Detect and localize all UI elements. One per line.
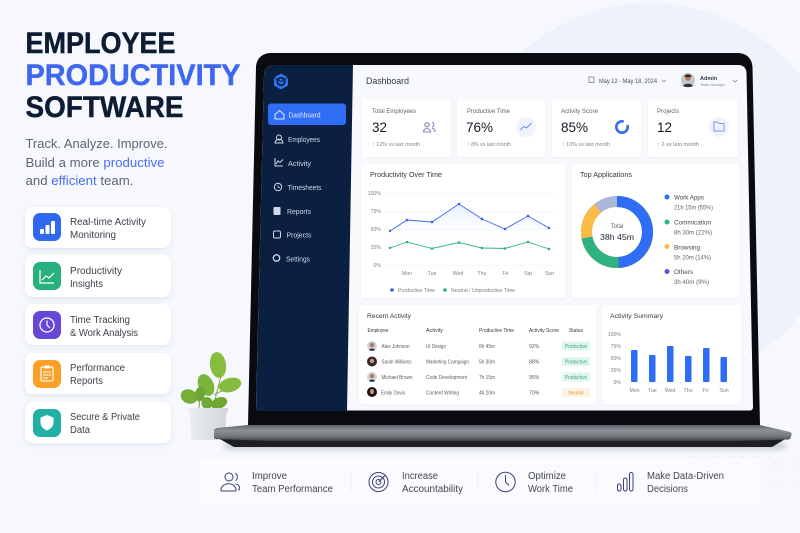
feature: time tracking <box>25 304 171 345</box>
date picker: May 12 - May 18, 2024 <box>599 79 658 85</box>
feature: secure data <box>25 402 171 443</box>
table header: Activity Score <box>529 328 559 334</box>
donut legend: Work Apps <box>674 196 704 202</box>
donut total: Total <box>611 224 623 230</box>
nav: settings: Settings <box>286 256 310 264</box>
admin profile <box>681 73 737 87</box>
title: SOFTWARE <box>26 91 184 124</box>
row: Michael Brown: Productive <box>565 375 587 381</box>
row: Alex Johnson: Alex Johnson <box>382 344 410 350</box>
table header <box>368 328 583 334</box>
benefit: work time <box>496 471 573 495</box>
panel: recent activity: Recent Activity <box>367 313 412 320</box>
line chart: Sat <box>524 271 532 277</box>
table header: Activity <box>426 328 443 334</box>
feature: time tracking: & Work Analysis <box>70 328 138 339</box>
dot grid: bottom <box>690 452 800 494</box>
chart legend <box>390 288 515 294</box>
line chart: Wed <box>453 271 463 277</box>
panel: productivity over time <box>361 164 565 298</box>
laptop base <box>214 425 792 441</box>
nav: reports: Reports <box>287 209 311 216</box>
feature: productivity insights: Productivity <box>70 266 122 277</box>
table header: Employee <box>368 328 389 334</box>
donut legend <box>664 194 713 286</box>
feature: secure data: Data <box>70 425 90 436</box>
bar chart <box>608 332 733 394</box>
subtitle: and efficient team. <box>26 173 134 188</box>
table rows <box>367 341 590 397</box>
donut total <box>600 224 634 242</box>
feature list <box>25 207 171 443</box>
line chart: Mon <box>402 271 412 277</box>
feature: time tracking: Time Tracking <box>70 315 130 326</box>
bar chart: Thu <box>684 388 693 394</box>
chart legend: Productive Time <box>398 288 435 294</box>
bar chart: 25% <box>611 368 621 374</box>
admin profile: Admin <box>700 76 718 82</box>
bar chart: 50% <box>611 356 621 362</box>
bar chart: 75% <box>611 344 621 350</box>
donut legend: Commication <box>674 220 711 226</box>
feature: real-time monitoring <box>25 207 171 248</box>
stat card: total employees: 32 <box>372 120 387 135</box>
sidebar <box>256 65 353 411</box>
nav: activity: Activity <box>288 161 312 168</box>
benefit: data driven: Decisions <box>647 484 688 495</box>
nav: dashboard active: Dashboard <box>288 112 321 120</box>
bar chart: Wed <box>665 388 675 394</box>
panel: activity summary: Activity Summary <box>610 313 664 320</box>
row: Alex Johnson: UI Design <box>426 344 446 350</box>
subtitle: Build a more productive <box>26 155 164 170</box>
bar chart: Mon <box>629 388 640 394</box>
subtitle: Track. Analyze. Improve. <box>26 136 168 151</box>
stat card: activity score <box>552 99 641 157</box>
nav: timesheets: Timesheets <box>288 185 322 192</box>
row: Alex Johnson <box>367 341 590 351</box>
donut total: 38h 45m <box>600 232 634 242</box>
row: Emily Davis: Content Writing <box>426 390 459 396</box>
stat card: projects <box>648 99 738 157</box>
benefit: team performance: Team Performance <box>252 484 333 495</box>
stat card: projects: 12 <box>657 120 672 135</box>
row: Michael Brown: Michael Brown <box>382 375 413 381</box>
date picker <box>589 77 666 85</box>
stat card: total employees <box>362 99 451 157</box>
stat card: projects: Projects <box>657 108 679 115</box>
stat card: activity score: ↑ 10% vs last month <box>562 142 610 148</box>
line chart: 50% <box>371 227 381 233</box>
panel: top applications <box>572 164 739 298</box>
row: Michael Brown <box>367 372 590 382</box>
laptop <box>214 53 792 449</box>
table header: Status <box>569 328 583 334</box>
benefit: work time: Optimize <box>528 471 566 482</box>
background circle <box>458 3 800 387</box>
laptop screen <box>256 65 753 410</box>
row: Emily Davis: 70% <box>529 390 540 396</box>
laptop lid <box>248 53 760 425</box>
donut legend: 3h 40m (9%) <box>674 280 709 286</box>
row: Emily Davis: 4h 20m <box>479 390 495 396</box>
row: Sarah Williams: Marketing Campaign <box>426 360 469 366</box>
row: Emily Davis: Emily Davis <box>381 390 405 396</box>
base underside <box>218 438 787 447</box>
benefit: data driven <box>618 471 724 495</box>
feature: real-time monitoring: Real-time Activity <box>70 217 146 228</box>
bottom benefits strip <box>200 458 760 504</box>
dashboard header: Dashboard <box>366 76 409 86</box>
row: Sarah Williams: Sarah Williams <box>382 360 412 366</box>
line chart: 75% <box>371 209 381 215</box>
laptop base shadow <box>225 443 785 449</box>
donut chart <box>586 202 648 262</box>
stat card: productive time: ↑ 8% vs last month <box>467 142 511 148</box>
donut legend: 21h 15m (55%) <box>674 206 713 212</box>
row: Alex Johnson: 6h 45m <box>479 344 495 350</box>
feature: productivity insights <box>25 255 171 297</box>
bar chart: Fri <box>702 388 709 394</box>
benefit: accountability <box>369 471 463 495</box>
row: Michael Brown: Code Development <box>426 375 468 381</box>
row: Sarah Williams: 88% <box>529 360 540 366</box>
row: Michael Brown: 7h 15m <box>479 375 495 381</box>
panel: activity summary <box>602 305 741 404</box>
admin profile: Team Manager <box>700 83 726 87</box>
nav: dashboard active <box>268 104 346 125</box>
benefit: data driven: Make Data-Driven <box>647 471 724 482</box>
nav items <box>273 135 322 264</box>
panel: productivity over time: Productivity Over Time <box>370 172 442 179</box>
panel: top applications: Top Applications <box>580 172 633 179</box>
benefit: work time: Work Time <box>528 484 573 495</box>
table header: Productive Time <box>479 328 514 334</box>
feature: performance reports: Performance <box>70 363 125 374</box>
line chart: 100% <box>368 191 381 197</box>
flower pot <box>188 408 228 440</box>
benefit: team performance <box>221 471 333 495</box>
benefit: accountability: Increase <box>402 471 438 482</box>
title: EMPLOYEE <box>26 27 176 60</box>
row: Sarah Williams: Productive <box>565 360 587 366</box>
stat card: projects: ↑ 2 vs last month <box>657 142 699 148</box>
logo <box>274 74 288 90</box>
panel: recent activity <box>359 305 596 404</box>
line chart: 0% <box>374 263 381 269</box>
plant <box>178 351 243 440</box>
stat card: activity score: 85% <box>561 120 588 135</box>
stat card: productive time: 76% <box>466 120 493 135</box>
row: Michael Brown: 95% <box>529 375 540 381</box>
stat card: productive time <box>457 99 545 157</box>
title: PRODUCTIVITY <box>26 59 240 92</box>
benefit: accountability: Accountability <box>402 484 463 495</box>
line chart <box>368 191 555 277</box>
row: Alex Johnson: Productive <box>565 344 587 350</box>
row: Emily Davis <box>367 387 590 397</box>
feature: performance reports <box>25 353 171 394</box>
donut legend: Browsing <box>674 246 700 252</box>
nav: employees: Employees <box>288 137 320 144</box>
dot grid: right <box>763 122 793 192</box>
feature: performance reports: Reports <box>70 376 103 387</box>
row: Sarah Williams <box>367 356 590 366</box>
feature: real-time monitoring: Monitoring <box>70 230 116 241</box>
line chart: 25% <box>371 245 381 251</box>
chart legend: Neutral / Unproductive Time <box>451 288 515 294</box>
stat card: productive time: Productive Time <box>467 108 511 115</box>
bar chart: Tue <box>648 388 657 394</box>
line chart: Tue <box>428 271 436 277</box>
bar chart: 100% <box>608 332 621 338</box>
stat card: total employees: Total Employees <box>372 108 416 115</box>
donut legend: Others <box>674 270 693 276</box>
feature: secure data: Secure & Private <box>70 412 140 423</box>
stat card: total employees: ↑ 12% vs last month <box>372 142 420 148</box>
line chart: Thu <box>478 271 487 277</box>
dashboard header <box>366 73 737 87</box>
stat card: activity score: Activity Score <box>561 108 599 115</box>
row: Alex Johnson: 92% <box>529 344 540 350</box>
row: Sarah Williams: 5h 30m <box>479 360 495 366</box>
donut legend: 5h 20m (14%) <box>674 256 711 262</box>
row: Emily Davis: Neutral <box>568 390 584 396</box>
line chart: Fri <box>502 271 509 277</box>
benefit: team performance: Improve <box>252 471 287 482</box>
subtitle <box>26 136 168 188</box>
feature: productivity insights: Insights <box>70 279 103 290</box>
donut legend: 8h 30m (22%) <box>674 230 712 236</box>
nav: projects: Projects <box>286 232 312 240</box>
line chart: Sun <box>545 271 554 277</box>
bar chart: 0% <box>614 380 621 386</box>
title <box>26 27 240 124</box>
bar chart: Sun <box>719 388 729 394</box>
